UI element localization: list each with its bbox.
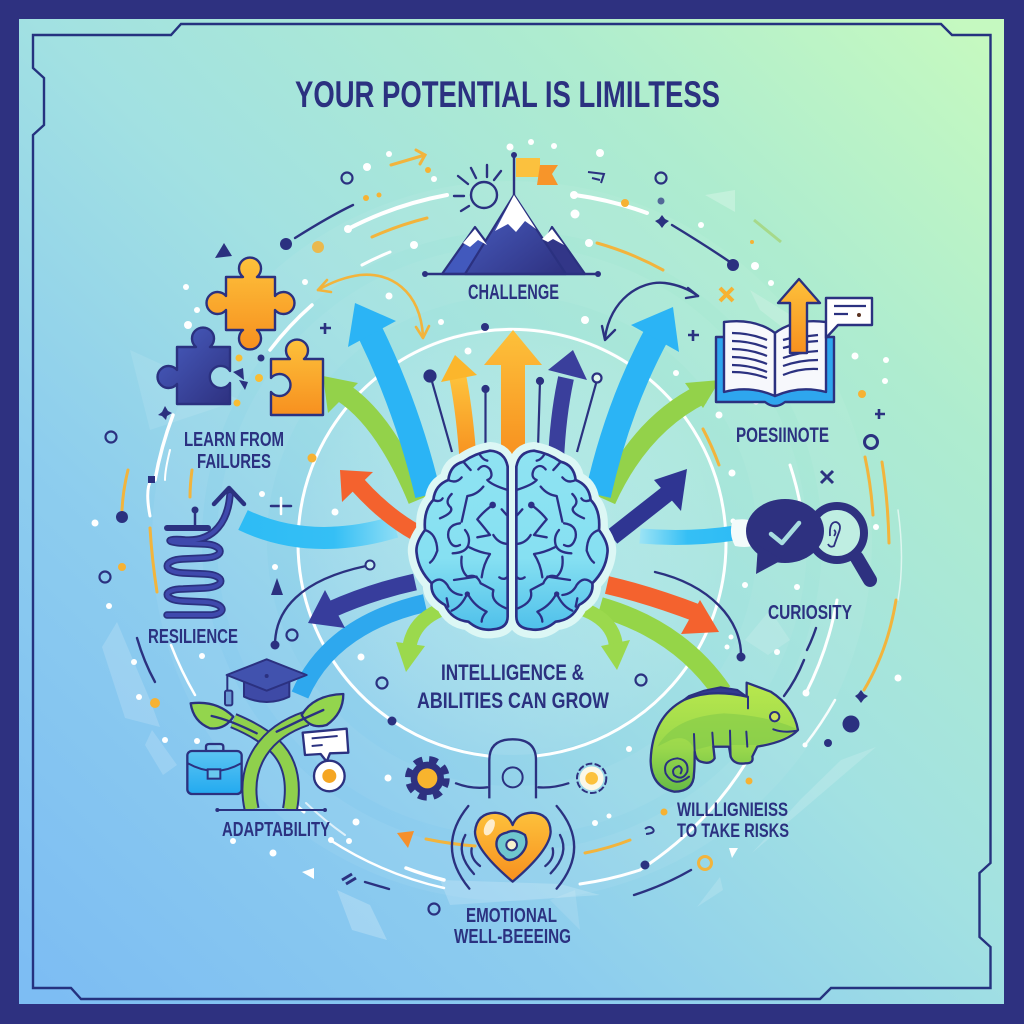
arrow: red lower right xyxy=(607,585,697,613)
label: curiosity: CURIOSITY xyxy=(768,602,853,624)
icon: adaptability plants xyxy=(187,659,348,812)
thin antenna lines xyxy=(424,370,602,452)
label: learn from failures: LEARN FROM xyxy=(184,429,284,451)
arrow: green lower right xyxy=(600,607,722,692)
label: emotional well-being xyxy=(454,904,571,948)
icon: curiosity speech bubble and magnifier xyxy=(731,499,870,580)
decorative orbit bands xyxy=(102,190,876,940)
label: learn from failures: FAILURES xyxy=(197,451,271,473)
label: willingness to take risks: WILLLIGNIEISS xyxy=(677,799,788,821)
white orbit arcs xyxy=(148,195,901,888)
navy orbit lines xyxy=(137,205,816,895)
title: YOUR POTENTIAL IS LIMILTESS xyxy=(295,74,720,115)
icon: mountain challenge xyxy=(422,152,601,277)
arrow: blue left band xyxy=(243,520,395,538)
small markers and dots xyxy=(92,139,902,914)
label: resilience: RESILIENCE xyxy=(148,625,238,648)
arrow: green upper left xyxy=(342,392,418,500)
arrow: orange small xyxy=(458,378,468,460)
curved connector arrows xyxy=(270,275,746,662)
icon: chameleon xyxy=(651,683,798,792)
label: emotional well-being: WELL-BEEEING xyxy=(454,925,571,948)
central brain xyxy=(416,451,608,630)
label: willingness to take risks xyxy=(677,799,789,842)
arrow: green small left xyxy=(409,608,445,650)
arrow: navy right xyxy=(612,493,668,537)
label: intelligence and abilities: INTELLIGENCE & xyxy=(441,660,584,685)
icon: emotional heart xyxy=(408,739,606,889)
icon: puzzle pieces xyxy=(158,258,323,415)
label: adaptability: ADAPTABILITY xyxy=(222,818,330,841)
arrow: red left xyxy=(358,485,415,532)
label: intelligence and abilities: ABILITIES CAN GROW xyxy=(417,688,609,713)
arrow: green upper right xyxy=(606,394,702,500)
icon: resilience spring xyxy=(167,488,291,615)
label: intelligence and abilities xyxy=(417,660,609,713)
arrow: blue right band xyxy=(640,533,735,537)
gold orbit arcs xyxy=(122,150,896,853)
arrow: navy small xyxy=(556,378,566,460)
arrow: green small right xyxy=(580,608,616,648)
label: challenge: CHALLENGE xyxy=(468,281,559,304)
label: willingness to take risks: TO TAKE RISKS xyxy=(677,820,789,842)
icon: book with arrow xyxy=(716,279,872,406)
label: poesiinote: POESIINOTE xyxy=(736,424,829,447)
arrow: blue upper left xyxy=(370,332,428,495)
arrow: navy lower left xyxy=(330,582,415,610)
arrow: blue upper right xyxy=(598,332,658,495)
arrows radiating from the brain xyxy=(243,303,735,695)
label: learn from failures xyxy=(184,429,284,473)
label: emotional well-being: EMOTIONAL xyxy=(466,904,557,927)
arrow: blue lower left xyxy=(300,603,425,695)
